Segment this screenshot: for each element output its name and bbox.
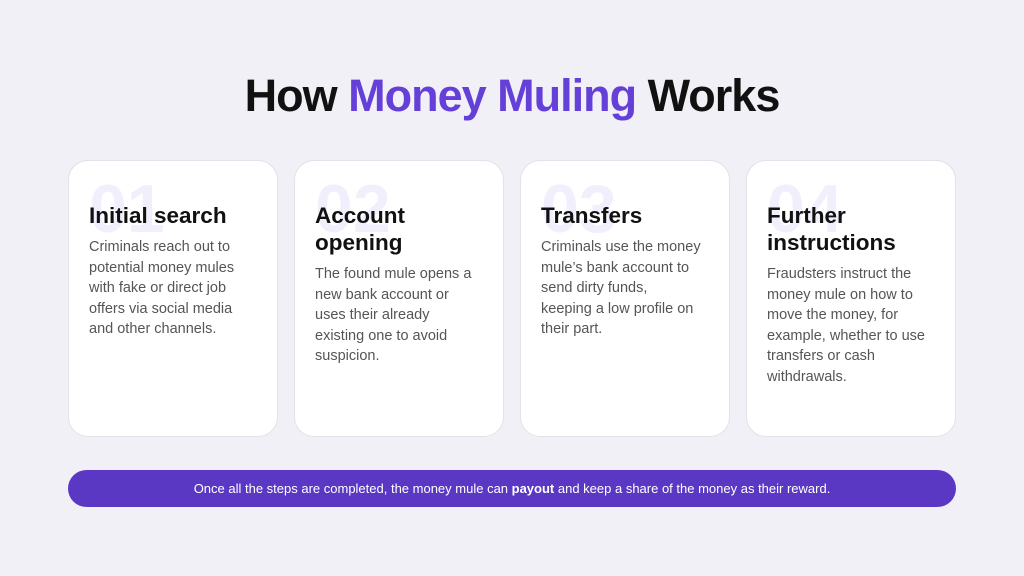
text [315,266,472,364]
text: potential money mules [89,260,234,276]
text: money mule on how to [767,287,913,303]
title: How Money Muling Works [245,70,779,121]
text: offers via social media [89,301,232,317]
panel: step 4 [746,160,956,437]
text: their part. [541,321,602,337]
number 03: 03 [541,171,617,247]
text: The found mule opens a [315,266,471,282]
text: transfers or cash [767,348,875,364]
text [767,266,925,385]
heading: opening [315,230,402,255]
text: mule’s bank account to [541,260,689,276]
number 01: 01 [89,171,165,247]
heading: Initial search [89,203,227,228]
text: example, whether to use [767,328,925,344]
heading [767,203,896,255]
panel: step 3 [520,160,730,437]
text: existing one to avoid [315,328,447,344]
text: send dirty funds, [541,280,647,296]
heading: Further [767,203,846,228]
text [89,239,234,337]
text: Criminals reach out to [89,239,230,255]
heading [315,203,405,255]
text: uses their already [315,307,429,323]
heading: instructions [767,230,896,255]
panel: step 1 [68,160,278,437]
callout bar [68,470,956,507]
text: Criminals use the money [541,239,701,255]
number 04: 04 [767,171,843,247]
heading: Account [315,203,405,228]
text: keeping a low profile on [541,301,693,317]
number 02: 02 [315,171,391,247]
text: with fake or direct job [89,280,226,296]
text: and other channels. [89,321,216,337]
panel: step 2 [294,160,504,437]
heading: Transfers [541,203,642,228]
text: withdrawals. [767,369,847,385]
text [541,239,701,337]
text: move the money, for [767,307,898,323]
callout bar: Once all the steps are completed, the money mule can payout and keep a share of the money as their reward. [194,481,830,496]
text: new bank account or [315,287,449,303]
text: Fraudsters instruct the [767,266,911,282]
text: suspicion. [315,348,379,364]
